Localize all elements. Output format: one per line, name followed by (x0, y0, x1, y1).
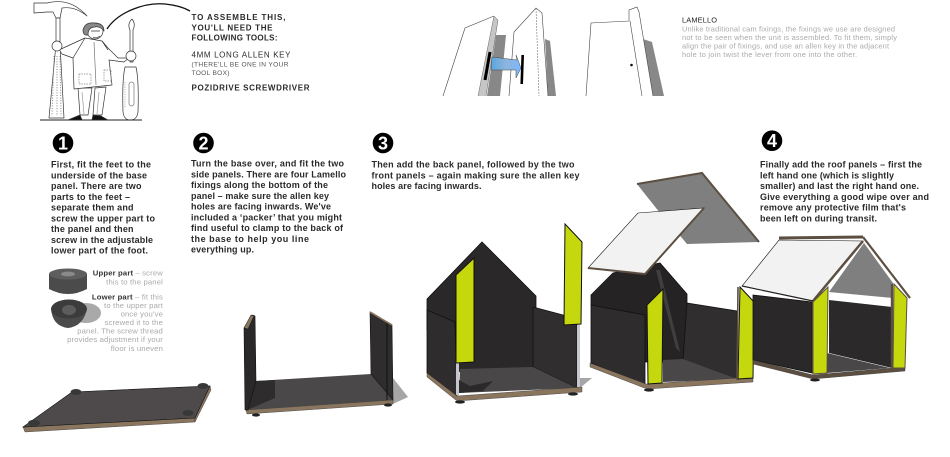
number badge 3 (373, 133, 393, 154)
step 4 instructions (760, 160, 929, 223)
step 1 instructions: lower part of the foot. (51, 246, 148, 256)
step 1 instructions: separate them and (51, 203, 134, 213)
diagram: lamello fixing, panels joined (586, 7, 664, 96)
step 2 instructions: everything up. (191, 245, 254, 255)
step 1 instructions: panel. There are two (51, 181, 142, 191)
illustration: finished house (737, 237, 910, 382)
heading: lamello: LAMELLO (682, 16, 717, 25)
foot part captions: to the upper part (104, 301, 164, 310)
number badge 2 (193, 133, 214, 154)
step 1 instructions: First, fit the feet to the (51, 160, 151, 170)
foot part captions (67, 269, 164, 353)
front right panel (564, 224, 582, 325)
step 1 instructions: underside of the base (51, 170, 147, 180)
text block: tools list: 4MM LONG ALLEN KEY (192, 51, 291, 60)
step 3 instructions: Then add the back panel, followed by the two (372, 160, 575, 170)
white roof (742, 240, 863, 301)
diagram: lamello fixing, panels apart (443, 8, 556, 96)
number badge 3: 3 (378, 134, 388, 154)
step 3 instructions: holes are facing inwards. (372, 181, 482, 191)
speech line (107, 4, 190, 29)
text block: lamello description (682, 16, 897, 59)
foot part captions: provides adjustment if your (67, 335, 163, 344)
illustration: base panel with feet (23, 383, 211, 432)
white roof panel (588, 208, 704, 274)
foot part captions: this to the panel (106, 277, 163, 286)
text block: tools list: YOU'LL NEED THE (192, 24, 273, 32)
front right panel (893, 284, 907, 368)
step 2 instructions: Turn the base over, and fit the two (191, 159, 344, 169)
text block: tools list (192, 13, 310, 93)
step 4 instructions: left hand one (which is slightly (760, 170, 894, 180)
text block: lamello description: hole to join twist the lever from one into the other. (682, 50, 857, 59)
text block: lamello description: Unlike traditional cam fixings, the fixings we use are designed (682, 24, 895, 34)
step 2 instructions: side panels. There are four Lamello (191, 169, 346, 179)
step 4 (588, 130, 929, 392)
step 2 instructions (191, 159, 346, 255)
illustration: house with back and front panels (427, 224, 592, 404)
number badge 4 (762, 130, 782, 151)
illustration: man with hammer and screwdriver (34, 2, 142, 120)
foot part captions: panel. The screw thread (77, 327, 163, 336)
step 2 instructions: panel – make sure the allen key (191, 191, 329, 201)
foot part captions: floor is uneven (111, 344, 163, 353)
front left panel (647, 289, 663, 384)
number badge 2: 2 (198, 134, 209, 154)
step 1 instructions: screw the upper part to (51, 213, 156, 223)
icon: screwdriver (123, 19, 138, 120)
step 2 instructions: the base to help you line (191, 234, 309, 244)
step 4 instructions: smaller) and last the right hand one. (760, 181, 919, 191)
step 1 instructions: screw in the adjustable (51, 235, 153, 245)
number badge 1: 1 (58, 134, 68, 154)
step 3 (372, 133, 592, 404)
number badge 4: 4 (767, 131, 777, 151)
step 1 instructions (51, 160, 156, 256)
text block: tools list: TOOL BOX) (192, 70, 230, 77)
front right panel (738, 287, 754, 379)
icon: scientist figure (52, 23, 136, 120)
step 3 instructions (372, 160, 580, 191)
step 4 instructions: Finally add the roof panels – first the (760, 160, 922, 170)
text block: tools list: POZIDRIVE SCREWDRIVER (192, 84, 310, 93)
foot part captions: screwed it to the (104, 318, 163, 327)
foot part captions: once you've (121, 310, 163, 319)
icon: lower foot part (51, 300, 101, 328)
icon: blue arrow (491, 55, 521, 78)
icon: upper foot part (49, 268, 87, 294)
text block: tools list: FOLLOWING TOOLS: (192, 34, 278, 43)
text block: tools list: TO ASSEMBLE THIS, (192, 13, 286, 22)
step 1 (23, 133, 211, 432)
icon: hammer (34, 2, 87, 118)
text block: lamello description: align the pair of fixings, and use an allen key in the adjacent (682, 41, 889, 50)
text block: lamello description: not to be seen when the unit is assembled. To fit them, simply (682, 33, 897, 42)
step 4 instructions: Give everything a good wipe over and (760, 192, 929, 202)
foot part captions: Lower part – fit this (92, 293, 163, 302)
illustration: house with roof panels being added (588, 173, 759, 392)
step 2 instructions: find useful to clamp to the back of (191, 223, 344, 233)
step 4 instructions: been left on during transit. (760, 213, 877, 223)
illustration: base with two side panels (244, 312, 408, 417)
text block: tools list: (THERE'LL BE ONE IN YOUR (192, 62, 289, 68)
foot part captions: Upper part – screw (93, 269, 163, 278)
step 2 instructions: included a ‘packer’ that you might (191, 212, 342, 222)
step 4 instructions: remove any protective film that's (760, 203, 906, 213)
step 2 (191, 133, 408, 417)
number badge 1 (53, 133, 73, 154)
step 2 instructions: holes are facing inwards. We've (191, 202, 331, 212)
front left panel (456, 258, 474, 363)
front left panel (813, 287, 828, 374)
step 2 instructions: fixings along the bottom of the (191, 180, 328, 190)
step 3 instructions: front panels – again making sure the allen key (372, 170, 580, 180)
step 1 instructions: parts to the feet – (51, 192, 130, 202)
step 1 instructions: the panel and then (51, 224, 134, 234)
